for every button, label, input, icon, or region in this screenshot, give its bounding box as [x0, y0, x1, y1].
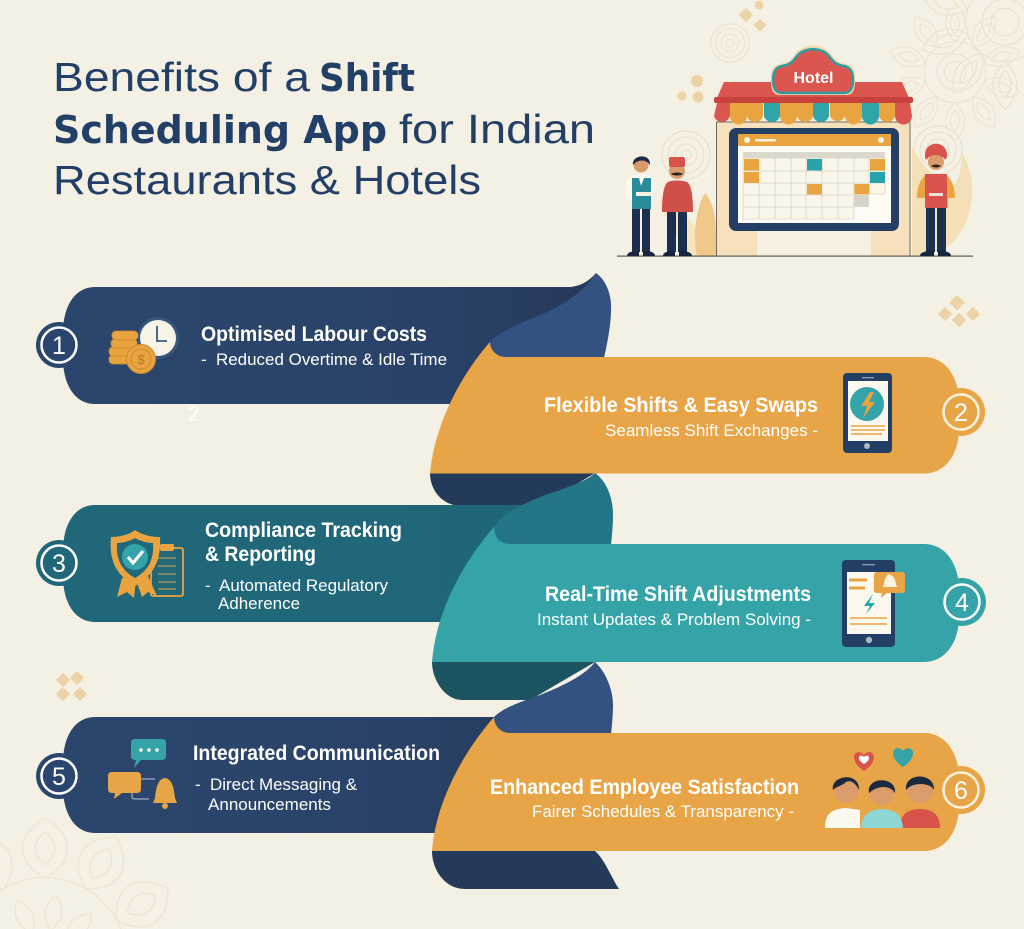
text: item 1: Optimised Labour Costs	[201, 323, 427, 346]
text: item 2: Flexible Shifts & Easy Swaps	[544, 394, 818, 417]
ribbon band 5	[63, 662, 613, 833]
staff: waiter with vest	[626, 156, 655, 256]
ribbon band 6	[432, 717, 959, 851]
text: item 5: Announcements	[208, 795, 331, 814]
decorative diamonds: top	[739, 0, 766, 32]
hotel sign: Hotel	[794, 70, 834, 87]
text: item 5	[193, 742, 440, 814]
text: item 6: Enhanced Employee Satisfaction	[490, 776, 799, 799]
badge 5	[36, 753, 82, 799]
text: item 3: Automated Regulatory	[219, 576, 388, 595]
icon: happy employees	[825, 748, 940, 828]
badge 6: 6	[954, 777, 968, 805]
title: Shift	[319, 56, 415, 100]
ribbon fold 3	[494, 473, 613, 545]
badge 3: 3	[52, 550, 66, 578]
hotel illustration	[617, 24, 973, 257]
ribbon band 2	[430, 342, 959, 474]
badge 2	[937, 388, 985, 436]
text: item 3	[205, 519, 402, 613]
badge 2: 2	[954, 399, 968, 427]
text: item 1	[201, 323, 447, 369]
text: item 4: Real-Time Shift Adjustments	[545, 583, 811, 606]
text: item 4: Instant Updates & Problem Solving -	[537, 610, 811, 629]
staff: man with turban and tray	[917, 144, 955, 256]
ribbon band 3	[63, 473, 613, 622]
decorative mandala: top right	[887, 0, 1024, 140]
text: item 3: Adherence	[218, 594, 300, 613]
staff: man in red coat	[662, 157, 693, 256]
person right	[900, 809, 940, 828]
text: item 6	[490, 776, 799, 821]
text: item 5: -	[195, 775, 201, 794]
crescent moon	[912, 147, 972, 256]
text: item 1: Reduced Overtime & Idle Time	[216, 350, 447, 369]
person center	[861, 809, 903, 828]
badge 4: 4	[955, 589, 969, 617]
text: item 2: Seamless Shift Exchanges -	[605, 421, 818, 440]
orange leaf	[695, 193, 717, 256]
ribbon band 4	[432, 527, 959, 662]
schedule screen	[729, 128, 899, 231]
decorative mandala: bottom left	[0, 818, 179, 929]
ribbon fold 5	[493, 662, 613, 734]
badge 5: 5	[52, 763, 66, 791]
title: Benefits of a	[53, 54, 310, 100]
decorative diamonds: left	[56, 671, 87, 701]
icon: communication bubbles and bell	[108, 739, 177, 809]
person left	[825, 808, 860, 828]
decorative diamonds: right	[938, 295, 980, 327]
text: item 3: -	[205, 576, 211, 595]
calendar grid	[743, 158, 885, 219]
text: item 3: & Reporting	[205, 543, 316, 566]
hotel building	[714, 82, 913, 256]
icon: phone with alert	[842, 560, 905, 647]
badge 3	[36, 540, 82, 586]
icon: compliance shield and clipboard	[111, 530, 183, 598]
icon: phone with lightning	[843, 373, 892, 453]
awning	[714, 103, 912, 124]
ground line	[617, 256, 973, 257]
text: item 2	[544, 394, 818, 440]
text: item 5: Integrated Communication	[193, 742, 440, 765]
icon: coins and clock	[109, 317, 179, 374]
badge 1: 1	[52, 332, 66, 360]
ribbon under-fold below band 2	[430, 473, 595, 506]
ribbon fold 1	[490, 273, 611, 358]
text: item 4	[537, 583, 811, 629]
hotel sign	[771, 46, 855, 95]
text: item 6: Fairer Schedules & Transparency -	[532, 802, 794, 821]
hearts	[854, 752, 874, 771]
text: item 5: Direct Messaging &	[210, 775, 358, 794]
title: Restaurants & Hotels	[53, 157, 481, 203]
title	[53, 54, 595, 203]
badge 1	[36, 322, 82, 368]
icon: coins and clock: $	[137, 352, 145, 367]
text: item 3: Compliance Tracking	[205, 519, 402, 542]
decorative dots	[678, 75, 704, 102]
stray numeral: 2	[188, 401, 200, 426]
ribbon band 1	[63, 273, 611, 404]
badge 6	[937, 766, 985, 814]
peach backdrop behind the staff	[660, 200, 717, 256]
ribbon under-fold below band 6	[432, 851, 619, 889]
text: item 1: -	[201, 350, 207, 369]
title: Scheduling App	[53, 108, 387, 152]
badge 4	[938, 578, 986, 626]
ribbon under-fold below band 4	[432, 662, 595, 700]
title: for Indian	[399, 106, 595, 152]
